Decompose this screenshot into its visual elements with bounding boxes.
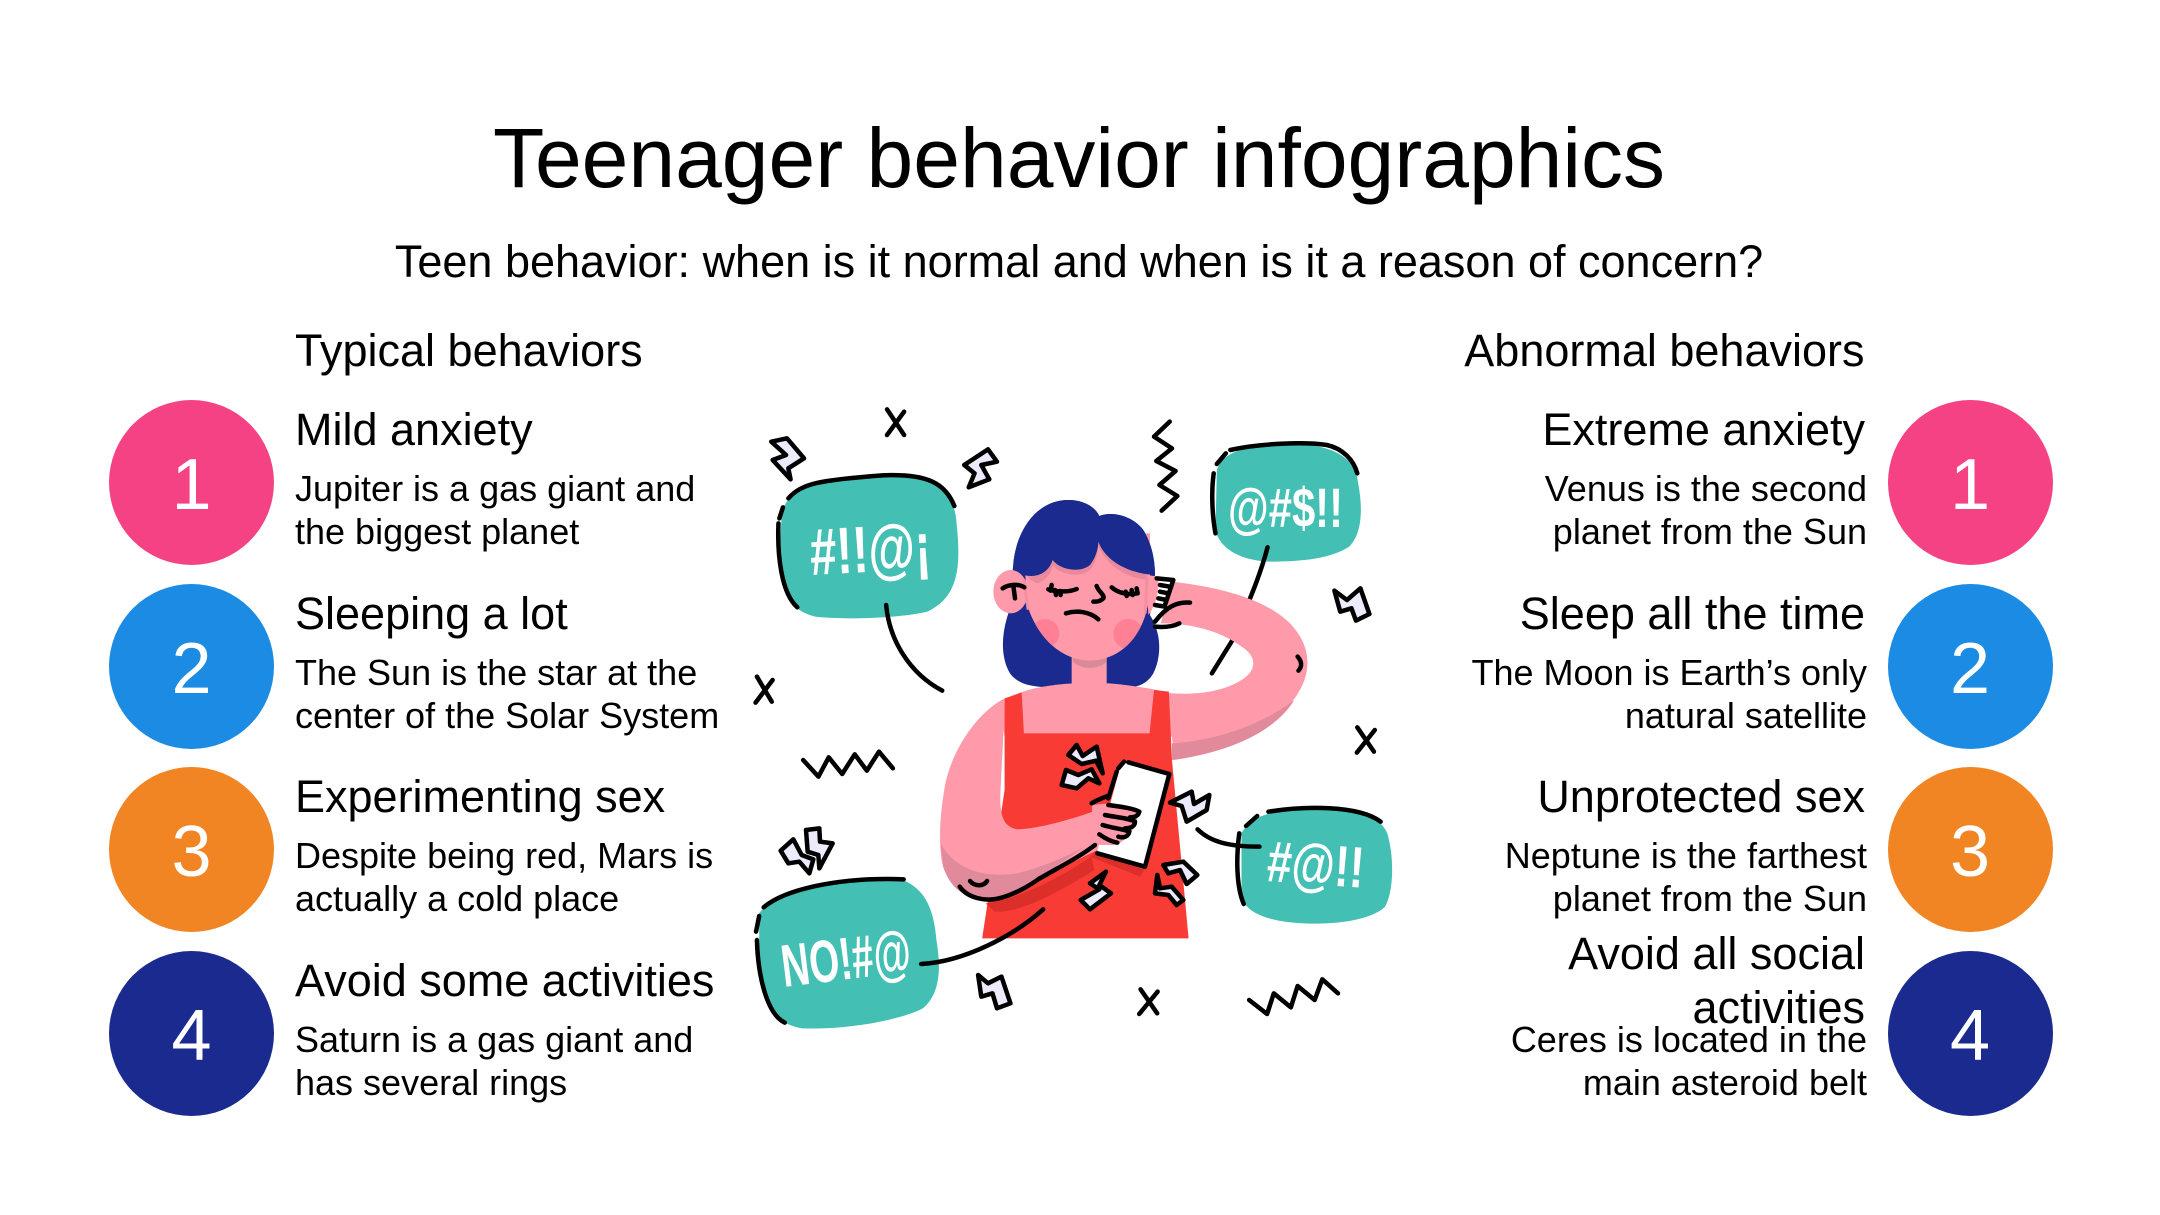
badge 4: 4 xyxy=(171,996,212,1076)
badge 3: 3 xyxy=(1950,812,1990,892)
badge 3: 3 xyxy=(171,812,212,892)
doodles: lightning bolts xyxy=(771,438,1369,1008)
illustration: stressed teenager with phone xyxy=(753,407,1392,1028)
item 1 text xyxy=(295,468,695,552)
badge 3 xyxy=(1888,767,2052,932)
item 4 title: activities xyxy=(1692,982,1865,1033)
item 3 text: actually a cold place xyxy=(295,878,619,919)
bubble: top right xyxy=(1212,443,1361,673)
badge 1: 1 xyxy=(171,445,212,525)
item 3 text: Despite being red, Mars is xyxy=(295,835,713,876)
item 4 title: Avoid some activities xyxy=(295,955,714,1006)
badge 2 xyxy=(109,584,274,749)
dress xyxy=(982,690,1189,938)
item 1 text: planet from the Sun xyxy=(1553,511,1867,552)
bolts around phone xyxy=(1062,745,1209,909)
item 2 title: Sleeping a lot xyxy=(295,588,568,639)
item 4 text: main asteroid belt xyxy=(1583,1062,1867,1103)
item 1 title: Extreme anxiety xyxy=(1542,404,1865,455)
badge 2: 2 xyxy=(171,629,212,709)
bubble: lower left xyxy=(756,879,939,1029)
face xyxy=(1023,533,1150,661)
subtitle: Teen behavior: when is it normal and when is it a reason of concern? xyxy=(395,236,1763,287)
phone and hand with bolts xyxy=(1040,745,1209,909)
doodles: crosses xyxy=(756,409,1375,1014)
panel: typical behaviors list xyxy=(109,400,719,1116)
phone outline and fingers xyxy=(1040,762,1169,878)
panel: abnormal behaviors list xyxy=(1471,400,2053,1116)
item 3 title: Unprotected sex xyxy=(1537,771,1865,822)
heading: typical behaviors: Typical behaviors xyxy=(295,325,643,376)
item 4 text: Saturn is a gas giant and xyxy=(295,1019,693,1060)
dress shadow xyxy=(986,857,1094,912)
right ear side xyxy=(1147,575,1158,615)
bubble text: lower left: NO!#@ xyxy=(777,918,915,1000)
item 2 text xyxy=(1471,652,1867,736)
item 3 text: planet from the Sun xyxy=(1553,878,1867,919)
item 1 text xyxy=(1544,468,1867,552)
badge 1 xyxy=(109,400,274,565)
item 2 text: center of the Solar System xyxy=(295,695,719,736)
badge 2 xyxy=(1888,584,2052,749)
item 1 title: Mild anxiety xyxy=(295,404,533,455)
item 2 title: Sleep all the time xyxy=(1520,588,1865,639)
item 4 text xyxy=(1511,1019,1867,1103)
cheeks xyxy=(1031,619,1143,649)
item 4 text xyxy=(295,1019,693,1103)
doodle: double bolt xyxy=(781,828,833,873)
badge 4 xyxy=(109,951,274,1116)
bubble: lower right xyxy=(1198,808,1392,924)
item 3 text: Neptune is the farthest xyxy=(1505,835,1867,876)
facial features xyxy=(1003,585,1138,619)
item 4 title xyxy=(1568,928,1865,1033)
title: Teenager behavior infographics xyxy=(493,111,1665,205)
item 1 text: Jupiter is a gas giant and xyxy=(295,468,695,509)
item 2 text: natural satellite xyxy=(1625,695,1867,736)
item 4 text: has several rings xyxy=(295,1062,567,1103)
lower left bubble tail xyxy=(921,909,1043,964)
hand on neck xyxy=(1150,615,1162,623)
item 2 text xyxy=(295,652,719,736)
badge 1: 1 xyxy=(1950,445,1990,525)
heading: abnormal behaviors: Abnormal behaviors xyxy=(1464,325,1864,376)
bubble: top left xyxy=(778,475,958,691)
raised arm xyxy=(1161,582,1307,760)
badge 4 xyxy=(1888,951,2052,1116)
item 4 title: Avoid all social xyxy=(1568,928,1865,978)
phone xyxy=(1097,762,1170,867)
badge 3 xyxy=(109,767,274,932)
chest and shoulders xyxy=(999,683,1172,737)
item 3 text xyxy=(1505,835,1867,919)
bangs shadow xyxy=(1023,540,1148,583)
bubble text: top right: @#$!! xyxy=(1228,476,1343,539)
badge 2: 2 xyxy=(1950,629,1990,709)
item 1 text: Venus is the second xyxy=(1545,468,1867,509)
bubble text: lower right: #@!! xyxy=(1265,829,1366,901)
left arm xyxy=(940,698,1125,898)
bubble text: top left: #!!@¡ xyxy=(808,509,933,589)
badge 4: 4 xyxy=(1950,996,1990,1076)
phone shadow xyxy=(1090,852,1147,877)
head xyxy=(993,500,1190,661)
badge 1 xyxy=(1888,400,2052,565)
item 1 text: the biggest planet xyxy=(295,511,579,552)
back hair and neck xyxy=(1003,500,1159,693)
item 2 text: The Sun is the star at the xyxy=(295,652,697,693)
item 3 text xyxy=(295,835,713,919)
hand xyxy=(1092,803,1139,845)
ear xyxy=(993,570,1028,613)
item 4 text: Ceres is located in the xyxy=(1511,1019,1867,1060)
doodles: zigzags xyxy=(803,422,1338,1014)
item 3 title: Experimenting sex xyxy=(295,771,665,822)
item 2 text: The Moon is Earth’s only xyxy=(1471,652,1867,693)
bangs xyxy=(1013,500,1155,576)
